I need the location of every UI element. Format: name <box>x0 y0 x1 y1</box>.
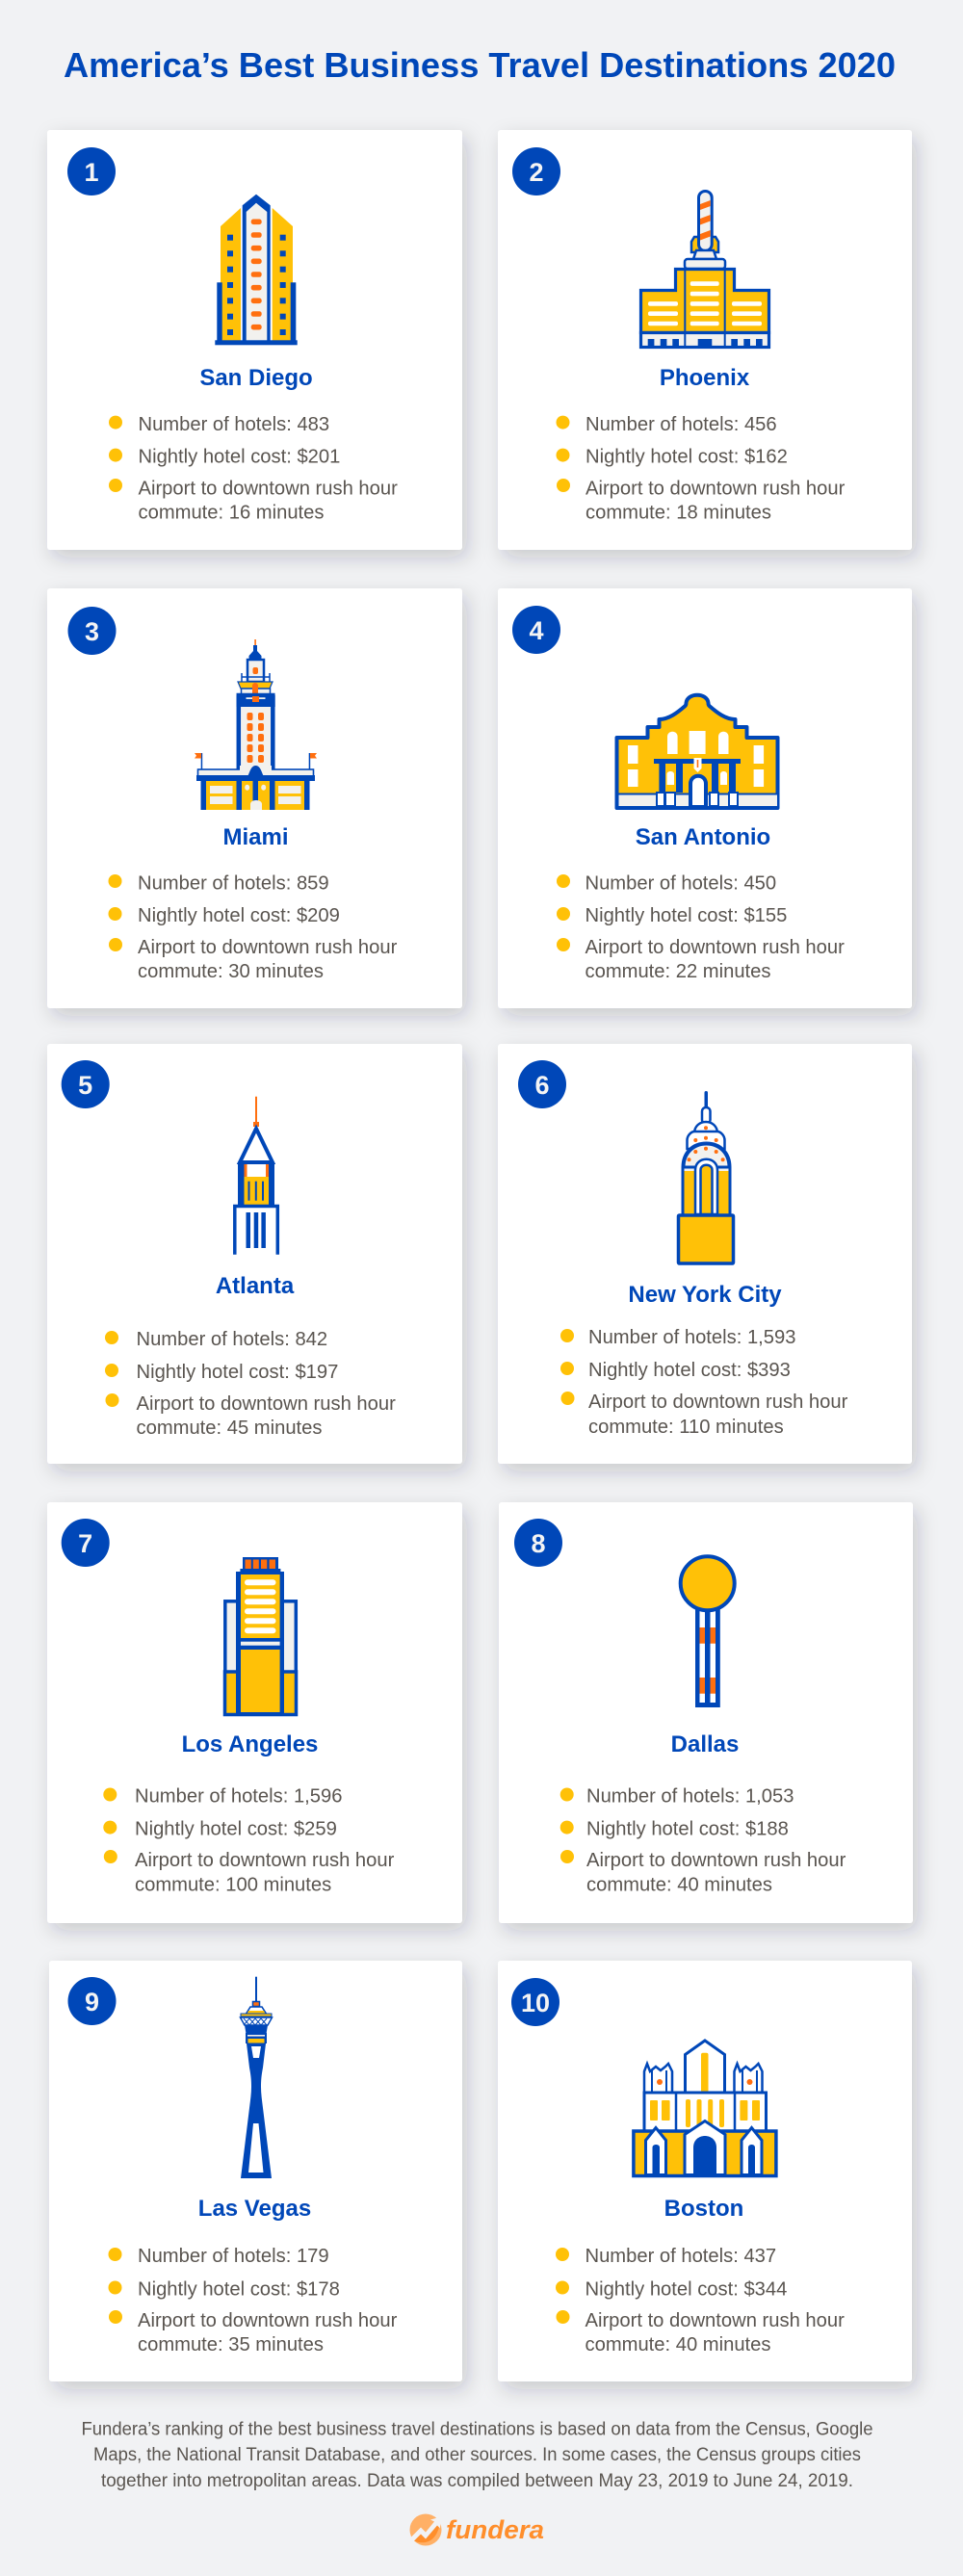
icon: Los Angeles skyscraper <box>225 1557 297 1716</box>
stats list: Airport to downtown rush hour <box>135 1850 395 1871</box>
stats list: Nightly hotel cost: $393 <box>588 1360 791 1381</box>
icon: Miami Freedom Tower <box>195 639 317 810</box>
stats list: commute: 40 minutes <box>586 1875 772 1896</box>
icon: Alamo <box>616 695 779 808</box>
panel: Dallas <box>499 1502 913 1923</box>
badge: 3: 3 <box>85 617 99 646</box>
badge: 2: 2 <box>529 158 544 187</box>
icon: Atlanta tower <box>235 1097 277 1255</box>
city name: Miami <box>222 824 289 850</box>
stats list <box>108 2246 398 2355</box>
city name: San Diego <box>199 365 313 391</box>
stats list: Nightly hotel cost: $155 <box>586 905 787 926</box>
stats list <box>560 1785 846 1896</box>
badge: 6: 6 <box>534 1071 550 1100</box>
stats list: commute: 16 minutes <box>139 503 324 524</box>
city name: New York City <box>628 1282 782 1308</box>
panel: San Antonio <box>498 588 912 1008</box>
badge: 9 <box>67 1977 116 2025</box>
stats list: Nightly hotel cost: $197 <box>137 1362 338 1383</box>
city name: Dallas <box>671 1731 739 1757</box>
stats list: Number of hotels: 1,593 <box>588 1327 795 1348</box>
stats list: commute: 18 minutes <box>586 503 771 524</box>
city name: Las Vegas <box>198 2196 311 2222</box>
badge: 5: 5 <box>78 1071 92 1100</box>
stats list <box>556 2246 845 2355</box>
stats list: Nightly hotel cost: $259 <box>135 1819 337 1840</box>
stats list: Airport to downtown rush hour <box>586 478 846 499</box>
badge: 2 <box>512 147 560 195</box>
panel: Los Angeles <box>47 1502 462 1923</box>
stats list: Number of hotels: 456 <box>586 414 777 435</box>
stats list: Airport to downtown rush hour <box>586 937 845 958</box>
stats list: commute: 35 minutes <box>138 2334 324 2355</box>
stats list <box>108 872 398 982</box>
stats list: Number of hotels: 1,053 <box>586 1785 794 1807</box>
stats list: commute: 40 minutes <box>586 2334 770 2355</box>
stats list: Nightly hotel cost: $162 <box>586 447 788 468</box>
stats list: Number of hotels: 437 <box>586 2246 776 2267</box>
stats list: Number of hotels: 859 <box>138 872 329 894</box>
logo: Fundera <box>410 2513 544 2546</box>
icon: San Diego tower <box>215 195 298 345</box>
badge: 9: 9 <box>85 1988 99 2017</box>
stats list: commute: 22 minutes <box>586 961 770 982</box>
stats list: Number of hotels: 179 <box>138 2246 329 2267</box>
panel: Boston <box>498 1961 912 2381</box>
stats list <box>109 414 398 524</box>
city name: Boston <box>664 2196 743 2222</box>
badge: 5 <box>62 1060 110 1108</box>
stats list: Airport to downtown rush hour <box>586 1850 846 1871</box>
panel: Las Vegas <box>49 1961 462 2381</box>
footnote <box>81 2419 873 2491</box>
badge: 3 <box>67 607 116 655</box>
icon: Reunion Tower <box>681 1556 735 1707</box>
badge: 4: 4 <box>529 616 544 645</box>
badge: 10 <box>511 1978 560 2026</box>
badge: 1: 1 <box>84 158 99 187</box>
stats list <box>557 414 846 524</box>
footnote: Fundera’s ranking of the best business travel destinations is based on data from the Census, Google <box>81 2419 873 2440</box>
stats list: Number of hotels: 483 <box>139 414 329 435</box>
badge: 1 <box>67 147 116 195</box>
stats list: Nightly hotel cost: $201 <box>139 447 340 468</box>
icon: Boston cathedral <box>634 2041 776 2176</box>
footnote: together into metropolitan areas. Data was compiled between May 23, 2019 to June 24, 2019. <box>101 2470 853 2491</box>
badge: 4 <box>512 606 560 654</box>
stats list: commute: 30 minutes <box>138 961 324 982</box>
panel: Miami <box>47 588 462 1008</box>
stats list: Airport to downtown rush hour <box>586 2310 845 2331</box>
panel: San Diego <box>47 130 462 550</box>
city name: Los Angeles <box>182 1731 318 1757</box>
badge: 10: 10 <box>521 1989 550 2017</box>
panel: Atlanta <box>47 1044 462 1464</box>
icon: Phoenix tower <box>641 191 768 347</box>
stats list: commute: 45 minutes <box>137 1418 322 1439</box>
stats list: Nightly hotel cost: $188 <box>586 1819 789 1840</box>
stats list <box>560 1327 848 1438</box>
stats list: Nightly hotel cost: $178 <box>138 2278 340 2300</box>
city name: Phoenix <box>660 365 750 391</box>
city name: San Antonio <box>636 824 770 850</box>
icon: Chrysler Building <box>678 1091 734 1263</box>
stats list: Number of hotels: 450 <box>586 872 776 894</box>
stats list <box>557 872 845 982</box>
stats list: commute: 100 minutes <box>135 1875 331 1896</box>
icon: Stratosphere Tower <box>241 1977 272 2178</box>
panel: Phoenix <box>498 130 912 550</box>
stats list: Number of hotels: 1,596 <box>135 1785 342 1807</box>
stats list: commute: 110 minutes <box>588 1417 784 1438</box>
badge: 8 <box>514 1519 562 1567</box>
stats list: Nightly hotel cost: $209 <box>138 905 340 926</box>
stats list: Airport to downtown rush hour <box>138 937 398 958</box>
stats list: Airport to downtown rush hour <box>588 1392 848 1413</box>
stats list: Number of hotels: 842 <box>137 1329 327 1350</box>
stats list <box>105 1329 396 1439</box>
panel: New York City <box>498 1044 912 1464</box>
badge: 8: 8 <box>531 1529 546 1558</box>
logo: Fundera: fundera <box>446 2515 544 2544</box>
stats list: Airport to downtown rush hour <box>139 478 398 499</box>
badge: 7 <box>62 1519 110 1567</box>
stats list <box>103 1785 395 1896</box>
footnote: Maps, the National Transit Database, and other sources. In some cases, the Census groups cities <box>93 2444 861 2465</box>
stats list: Nightly hotel cost: $344 <box>586 2278 787 2300</box>
title: America’s Best Business Travel Destinations 2020 <box>64 45 896 85</box>
stats list: Airport to downtown rush hour <box>138 2310 398 2331</box>
city name: Atlanta <box>216 1273 295 1299</box>
stats list: Airport to downtown rush hour <box>137 1393 396 1415</box>
badge: 7: 7 <box>78 1529 92 1558</box>
badge: 6 <box>518 1060 566 1108</box>
